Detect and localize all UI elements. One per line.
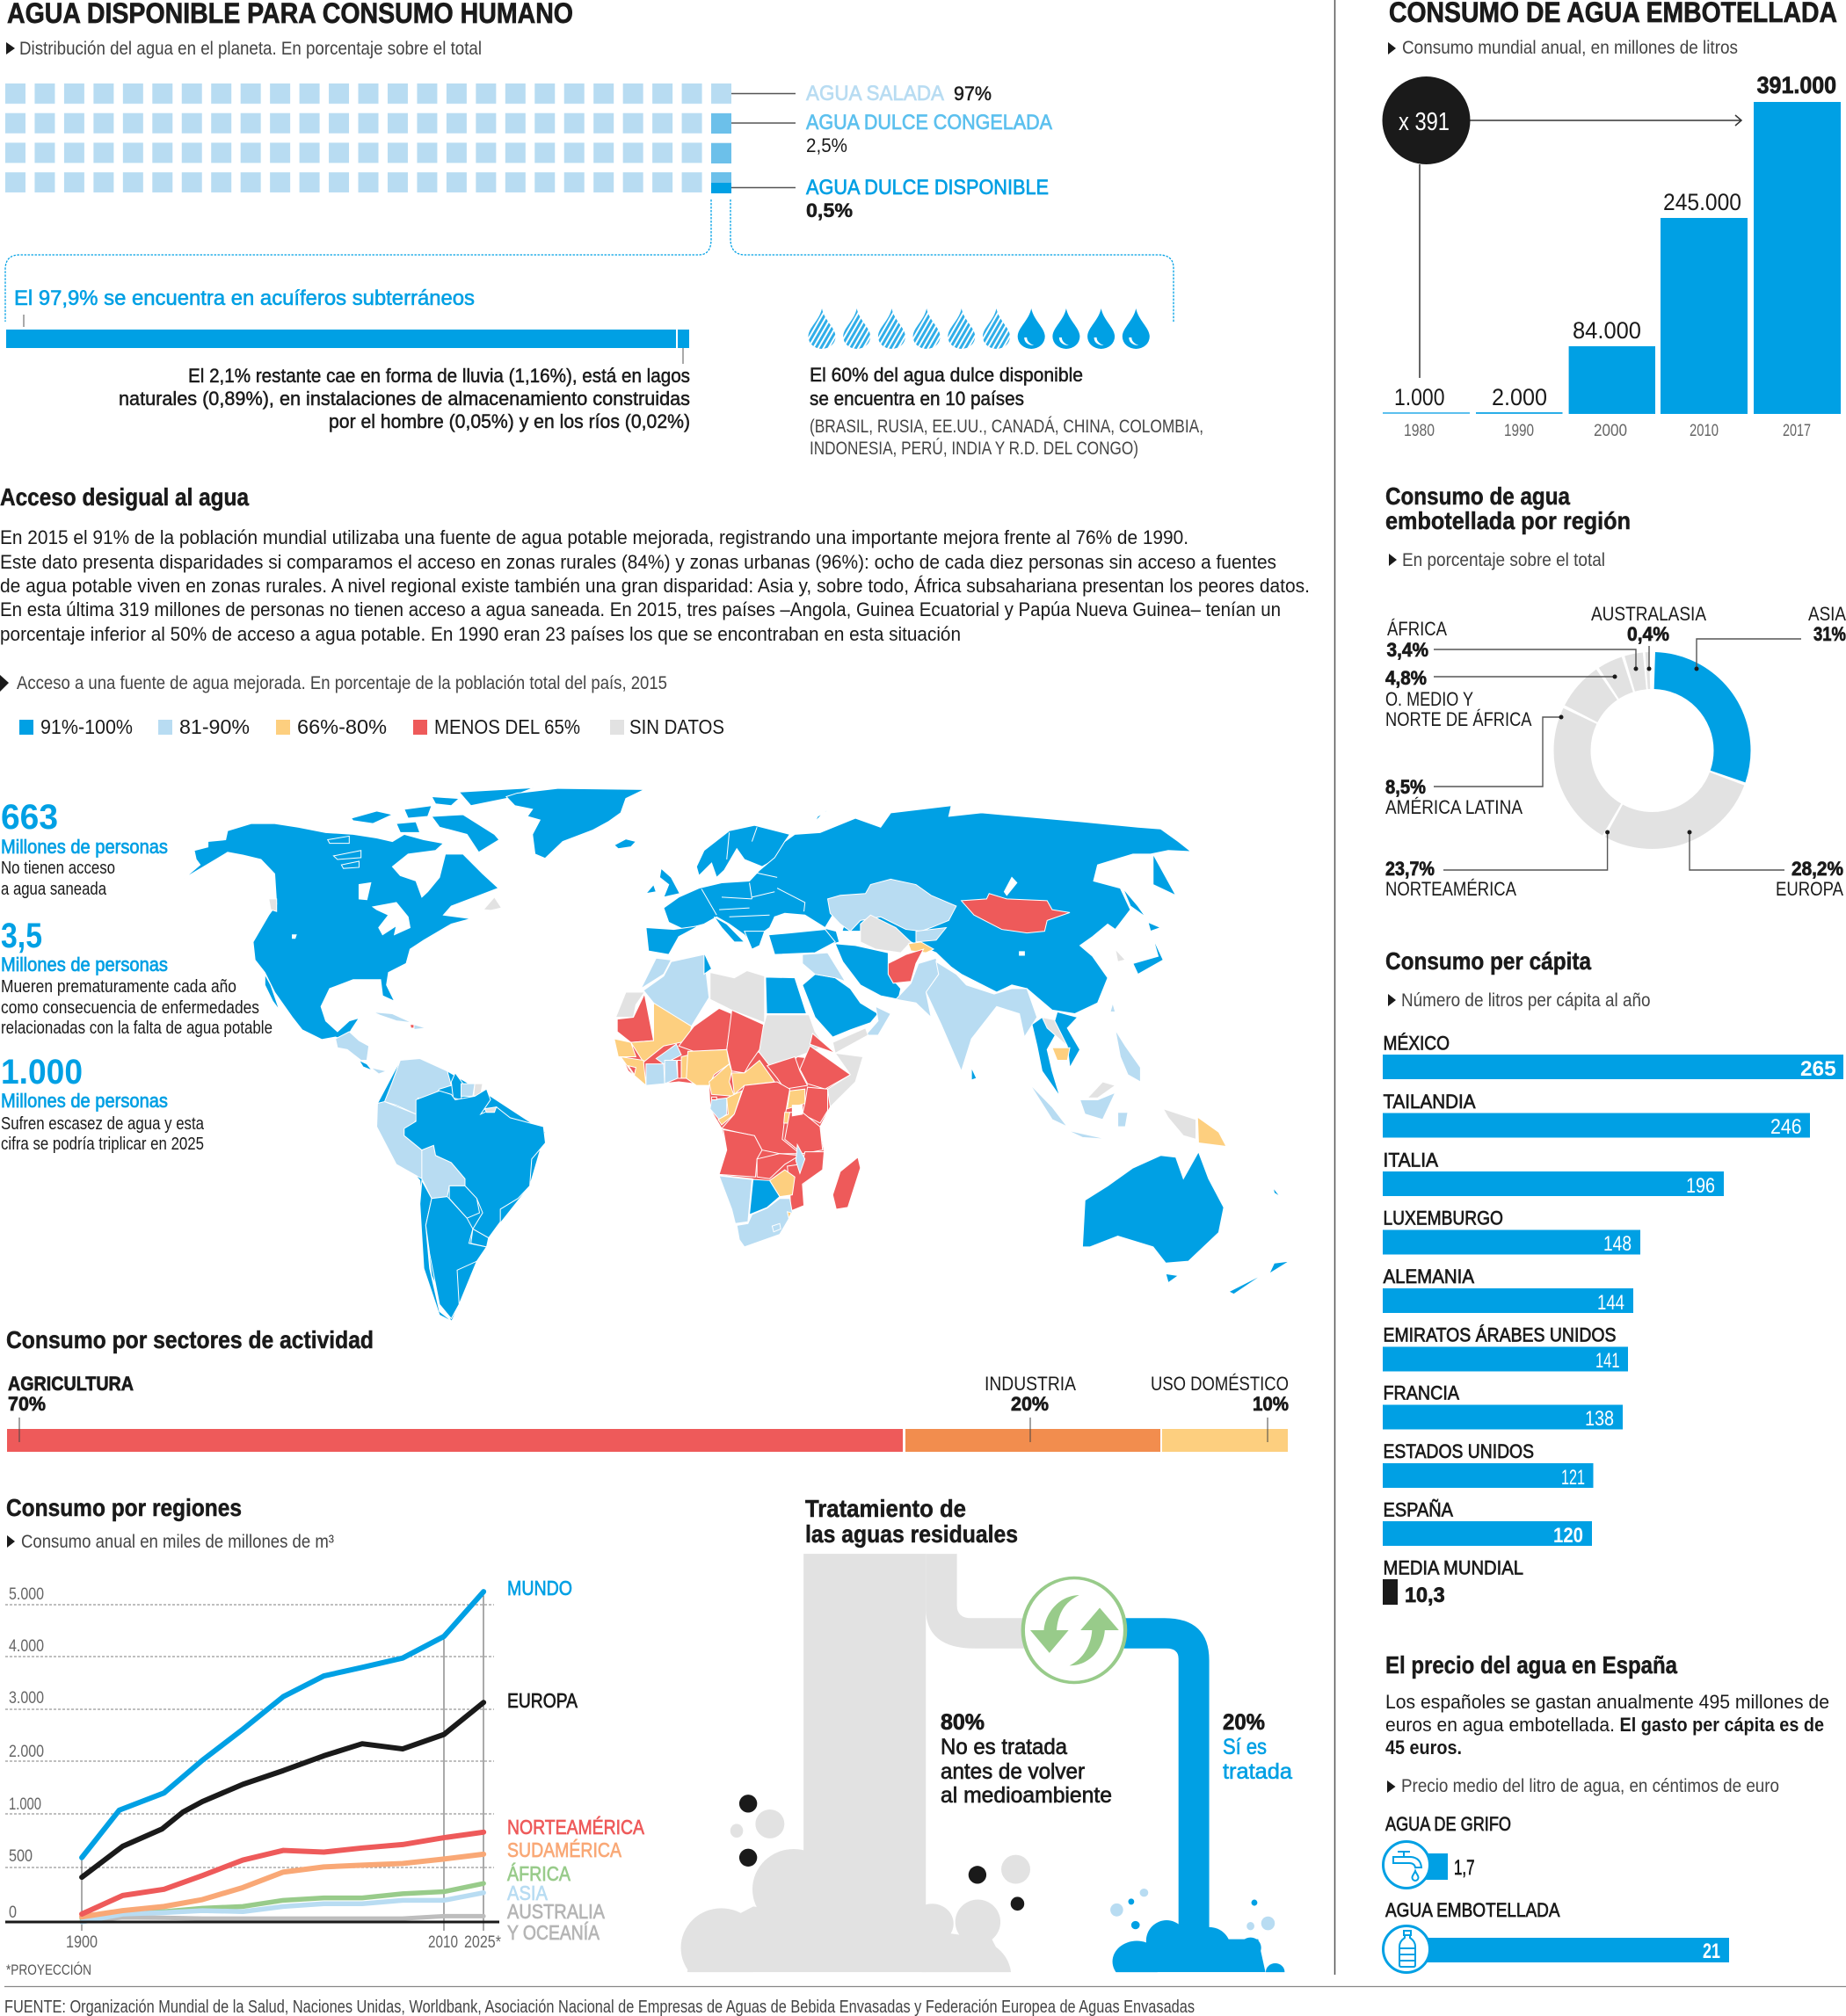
stat: 1.000: cifra se podría triplicar en 2025 <box>1 1135 204 1154</box>
chart: bottled water bars <box>1383 72 1841 440</box>
heading: consumo por regiones: Consumo por regiones <box>6 1494 242 1521</box>
stat: 1.000: Sufren escasez de agua y esta <box>1 1114 205 1134</box>
labels: donut: 23,7% <box>1385 858 1435 880</box>
text block: precio: 45 euros. <box>1385 1737 1462 1759</box>
subtitle: por región: En porcentaje sobre el total <box>1402 550 1605 570</box>
subtitle: precio medio: Precio medio del litro de agua, en céntimos de euro <box>1401 1776 1779 1796</box>
stat: 663: 663 <box>1 798 58 837</box>
heading: consumo per cápita: Consumo per cápita <box>1385 947 1591 975</box>
labels: regiones: ASIA <box>507 1882 549 1904</box>
map: world water access <box>185 787 1290 1323</box>
text block: acceso: Este dato presenta disparidades si comparamos el acceso en zonas rurales (84%) y zonas urbanas (96%): ocho de cada diez personas sin acceso a fuentes <box>0 551 1276 573</box>
legend: map: 66%-80% <box>297 715 387 738</box>
chart: regiones line chart: 2010 <box>428 1933 458 1952</box>
text: 20% tratada: tratada <box>1223 1759 1292 1784</box>
chart: bottled water bars: 1.000 <box>1394 384 1445 410</box>
bubbles <box>730 1795 1275 1930</box>
labels: regiones: AUSTRALIA <box>507 1900 606 1923</box>
labels: donut: NORTE DE ÁFRICA <box>1385 708 1532 730</box>
chart: regiones line chart: 3.000 <box>9 1689 44 1708</box>
label: agua dulce disponible: 0,5% <box>806 199 853 221</box>
stat: 663: No tienen acceso <box>1 859 115 878</box>
text: 20% tratada: Sí es <box>1223 1735 1267 1759</box>
labels: donut: AMÉRICA LATINA <box>1385 796 1523 818</box>
chart: per capita bars: TAILANDIA <box>1384 1091 1476 1113</box>
chart: regiones line chart: 0 <box>9 1904 17 1922</box>
chart: per capita bars: MÉXICO <box>1384 1032 1450 1055</box>
label: agua dulce congelada <box>806 111 1052 156</box>
labels: regiones: Y OCEANÍA <box>507 1921 600 1944</box>
text: 60% del agua dulce <box>810 364 1203 459</box>
labels: donut: 0,4% <box>1627 623 1669 645</box>
chart: per capita bars: 10,3 <box>1405 1584 1445 1607</box>
chart: regiones line chart: 2.000 <box>9 1743 44 1761</box>
map: Americas <box>185 787 545 1323</box>
treatment recycling icon <box>1023 1577 1125 1683</box>
bar: agua de grifo <box>1384 1813 1511 1888</box>
chart: per capita bars: LUXEMBURGO <box>1384 1207 1503 1229</box>
chart: per capita bars: 196 <box>1686 1174 1715 1198</box>
label: agua dulce congelada: 2,5% <box>806 134 847 156</box>
labels: donut: O. MEDIO Y <box>1385 688 1473 710</box>
chart: per capita bars <box>1383 1032 1843 1607</box>
subtitle: consumo mundial: Consumo mundial anual, en millones de litros <box>1402 38 1738 58</box>
chart: per capita bars: 265 <box>1800 1057 1836 1081</box>
labels: donut: NORTEAMÉRICA <box>1385 878 1516 900</box>
text: 20% tratada: 20% <box>1223 1710 1265 1735</box>
text block: precio: euros en agua embotellada. <box>1385 1714 1615 1736</box>
label: agua dulce disponible <box>806 176 1049 221</box>
bar: agua embotellada: 21 <box>1703 1940 1720 1963</box>
chart: water distribution grid <box>5 83 796 193</box>
text block: acceso: En 2015 el 91% de la población mundial utilizaba una fuente de agua potable mejorada, registrando una importante mejora frente al 76% de 1990. <box>0 526 1188 548</box>
label: agricultura <box>8 1373 134 1415</box>
chart: per capita bars: FRANCIA <box>1384 1381 1459 1404</box>
label: uso doméstico: USO DOMÉSTICO <box>1151 1373 1289 1395</box>
chart: per capita bars: 246 <box>1770 1115 1802 1139</box>
stat: 663: a agua saneada <box>1 880 107 899</box>
text: 2,1% restante: por el hombre (0,05%) y en los ríos (0,02%) <box>329 410 690 432</box>
text: 2,1% restante: naturales (0,89%), en instalaciones de almacenamiento construidas <box>119 388 690 410</box>
chart: donut by region <box>1572 671 1732 830</box>
chart: per capita bars: ITALIA <box>1384 1149 1438 1171</box>
text block: acceso: de agua potable viven en zonas rurales. A nivel regional existe también una gran disparidad: Asia y, sobre todo, África subsahariana presentan los peores datos. <box>0 575 1310 597</box>
text: 60% del agua dulce: El 60% del agua dulce disponible <box>810 364 1083 386</box>
chart: regiones line chart: 1.000 <box>9 1795 41 1814</box>
bar: agua de grifo: 1,7 <box>1454 1856 1475 1880</box>
label: agua salada: 97% <box>954 83 992 105</box>
text: 2,1% restante <box>119 365 690 432</box>
text: 2,1% restante: El 2,1% restante cae en forma de lluvia (1,16%), está en lagos <box>188 365 690 387</box>
chart: per capita bars: 148 <box>1603 1232 1632 1256</box>
chart: bottled water bars: 2.000 <box>1492 384 1547 410</box>
stat: 3,5: Mueren prematuramente cada año <box>1 977 236 997</box>
text block: acceso <box>0 526 1310 645</box>
label: agricultura: AGRICULTURA <box>8 1373 134 1395</box>
label: uso doméstico <box>1151 1373 1289 1415</box>
chart: per capita bars: EMIRATOS ÁRABES UNIDOS <box>1384 1323 1616 1346</box>
labels: donut: 28,2% <box>1791 858 1843 880</box>
text block: acceso: porcentaje inferior al 50% de acceso a agua potable. En 1990 eran 23 países los que se encontraban en esta situación <box>0 623 961 645</box>
leaders: donut <box>1434 639 1801 870</box>
bar: agua embotellada <box>1384 1899 1729 1972</box>
subtitle: per cápita: Número de litros per cápita al año <box>1401 990 1651 1011</box>
chart: regiones line chart <box>5 1585 502 1952</box>
stat: 3,5: 3,5 <box>1 917 42 955</box>
text: 80% no tratada: No es tratada <box>941 1735 1067 1759</box>
stat: 3,5: relacionadas con la falta de agua potable <box>1 1019 273 1038</box>
chart: per capita bars: 141 <box>1595 1349 1619 1373</box>
chart: regiones line chart: 2025* <box>464 1933 502 1952</box>
text: 20% tratada <box>1223 1710 1292 1784</box>
chart: bottled water bars: 1990 <box>1504 422 1534 440</box>
labels: regiones <box>507 1577 645 1944</box>
labels: regiones: EUROPA <box>507 1689 578 1712</box>
text block: acceso: En esta última 319 millones de personas no tienen acceso a agua saneada. En 2015, tres países –Angola, Guinea Ecuatorial y Papúa Nueva Guinea– tenían un <box>0 598 1281 620</box>
stat: 1.000: Millones de personas <box>1 1090 168 1112</box>
stat: 663 <box>1 798 168 899</box>
chart: bottled water bars: 1980 <box>1404 422 1435 440</box>
heading: sectores: Consumo por sectores de actividad <box>6 1326 374 1353</box>
legend: map: MENOS DEL 65% <box>434 715 580 738</box>
labels: regiones: MUNDO <box>507 1577 572 1599</box>
bar: aquifers <box>6 315 689 364</box>
bracket: dotted connectors <box>5 199 1174 323</box>
chart: regiones line chart: 1900 <box>66 1933 98 1952</box>
label: agricultura: 70% <box>8 1393 46 1415</box>
label: industria: INDUSTRIA <box>985 1373 1076 1395</box>
subtitle: acceso a una fuente: Acceso a una fuente de agua mejorada. En porcentaje de la población total del país, 2015 <box>17 673 667 693</box>
chart: per capita bars: 120 <box>1553 1524 1583 1548</box>
chart: per capita bars: ESPAÑA <box>1384 1499 1453 1520</box>
chart: per capita bars: MEDIA MUNDIAL <box>1384 1557 1523 1578</box>
heading: acceso desigual: Acceso desigual al agua <box>0 483 249 511</box>
chart: regiones line chart: 4.000 <box>9 1637 44 1656</box>
heading: por región: Consumo de agua <box>1385 482 1570 510</box>
illustration: wastewater pipes <box>681 1554 1284 2013</box>
labels: donut: AUSTRALASIA <box>1591 603 1706 625</box>
text block: precio <box>1385 1691 1829 1759</box>
labels: donut <box>1385 603 1846 900</box>
note: proyección: *PROYECCIÓN <box>6 1962 91 1978</box>
labels: donut: 8,5% <box>1385 776 1426 798</box>
chart: per capita bars: ESTADOS UNIDOS <box>1384 1440 1534 1462</box>
heading: tratamiento <box>805 1495 1018 1548</box>
callout: x 391 with arrow <box>1382 76 1741 378</box>
heading: por región: embotellada por región <box>1385 507 1631 534</box>
stat: 3,5: como consecuencia de enfermedades <box>1 998 259 1018</box>
stat: 3,5 <box>1 917 273 1038</box>
chart: bottled water bars: 245.000 <box>1663 189 1741 215</box>
bar: agua embotellada: AGUA EMBOTELLADA <box>1385 1899 1560 1921</box>
chart: per capita bars: 121 <box>1561 1466 1585 1490</box>
heading: por región <box>1385 482 1631 534</box>
label: agua dulce congelada: AGUA DULCE CONGELADA <box>806 111 1052 134</box>
heading: tratamiento: las aguas residuales <box>805 1520 1018 1548</box>
chart: bottled water bars: 391.000 <box>1757 72 1836 98</box>
text: 80% no tratada: antes de volver <box>941 1759 1085 1784</box>
text: 60% del agua dulce: se encuentra en 10 países <box>810 388 1024 410</box>
text block: precio: Los españoles se gastan anualmente 495 millones de <box>1385 1691 1829 1713</box>
stat: 663: Millones de personas <box>1 836 168 858</box>
labels: regiones: SUDAMÉRICA <box>507 1838 622 1861</box>
chart: bottled water bars: 2010 <box>1690 422 1719 440</box>
chart: regiones line chart: 5.000 <box>9 1585 44 1604</box>
label: industria <box>985 1373 1076 1415</box>
label: uso doméstico: 10% <box>1253 1393 1289 1415</box>
subtitle: regiones: Consumo anual en miles de millones de m³ <box>21 1532 334 1552</box>
text: 60% del agua dulce: INDONESIA, PERÚ, INDIA Y R.D. DEL CONGO) <box>810 439 1138 459</box>
grey untreated water <box>681 1554 1026 2013</box>
bar: agua de grifo: AGUA DE GRIFO <box>1385 1813 1511 1835</box>
text: 80% no tratada: 80% <box>941 1710 985 1735</box>
chart: per capita bars: 144 <box>1597 1291 1624 1315</box>
legend: map <box>19 715 724 738</box>
blue treated water <box>1113 1618 1284 1983</box>
labels: donut: ÁFRICA <box>1387 618 1447 640</box>
legend: map: 91%-100% <box>40 715 133 738</box>
legend: map: 81-90% <box>179 715 250 738</box>
heading: precio del agua: El precio del agua en España <box>1385 1651 1677 1679</box>
chart: sectores stacked bar <box>7 1418 1288 1452</box>
text: 60% del agua dulce: (BRASIL, RUSIA, EE.UU., CANADÁ, CHINA, COLOMBIA, <box>810 417 1203 437</box>
subtitle: distribución del agua: Distribución del agua en el planeta. En porcentaje sobre el total <box>19 39 482 59</box>
stat: 3,5: Millones de personas <box>1 954 168 975</box>
label: agua dulce disponible: AGUA DULCE DISPONIBLE <box>806 176 1049 199</box>
chart: bottled water bars: 2000 <box>1594 422 1627 440</box>
map: Europe, Asia, Africa, Oceania <box>506 788 1290 1294</box>
chart: per capita bars: ALEMANIA <box>1384 1265 1474 1287</box>
chart: regiones line chart: 500 <box>9 1847 33 1866</box>
chart: per capita bars: 138 <box>1585 1407 1614 1431</box>
labels: donut: 3,4% <box>1387 639 1428 661</box>
stat: 1.000 <box>1 1053 205 1154</box>
text: 80% no tratada: al medioambiente <box>941 1783 1112 1808</box>
stat: 1.000: 1.000 <box>1 1053 83 1091</box>
callout: x 391 with arrow: x 391 <box>1399 108 1450 136</box>
chart: bottled water bars: 84.000 <box>1573 317 1641 344</box>
text: 80% no tratada <box>941 1710 1112 1808</box>
labels: donut: 4,8% <box>1385 667 1427 689</box>
label: industria: 20% <box>1011 1393 1049 1415</box>
text block: precio: El gasto per cápita es de <box>1619 1714 1824 1736</box>
heading: tratamiento: Tratamiento de <box>805 1495 966 1522</box>
heading: acuíferos: El 97,9% se encuentra en acuíferos subterráneos <box>14 286 475 310</box>
icons: ten water drops <box>809 308 1150 349</box>
labels: regiones: ÁFRICA <box>507 1862 571 1885</box>
chart: bottled water bars: 2017 <box>1783 422 1811 440</box>
legend: map: SIN DATOS <box>629 715 724 738</box>
label: agua salada: AGUA SALADA <box>806 82 944 105</box>
labels: regiones: NORTEAMÉRICA <box>507 1816 645 1838</box>
